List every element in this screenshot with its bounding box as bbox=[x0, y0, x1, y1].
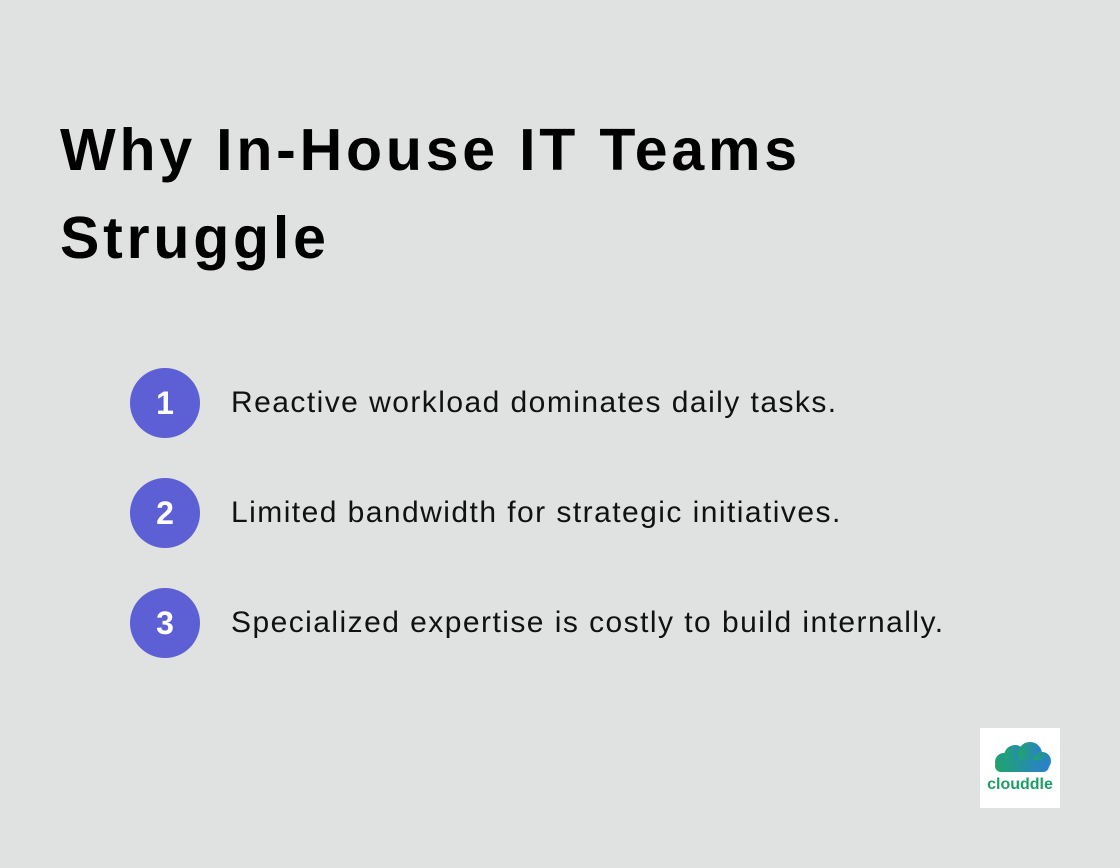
item 2 text: Limited bandwidth for strategic initiatives. bbox=[231, 496, 842, 529]
item 3 bbox=[130, 588, 944, 658]
item 1 bbox=[130, 368, 838, 438]
icon: clouds bbox=[995, 742, 1051, 772]
item 3 text: Specialized expertise is costly to build internally. bbox=[231, 606, 944, 639]
title: Struggle bbox=[60, 205, 330, 271]
number badge 3: 3 bbox=[156, 605, 174, 641]
number badge 3 bbox=[130, 588, 200, 658]
title bbox=[60, 117, 801, 271]
item 2 bbox=[130, 478, 842, 548]
title: Why In-House IT Teams bbox=[60, 117, 801, 183]
number badge 1 bbox=[130, 368, 200, 438]
number badge 2: 2 bbox=[156, 495, 174, 531]
number badge 1: 1 bbox=[156, 385, 174, 421]
item 1 text: Reactive workload dominates daily tasks. bbox=[231, 386, 838, 419]
logo text: clouddle bbox=[987, 776, 1053, 793]
number badge 2 bbox=[130, 478, 200, 548]
logo: clouddle bbox=[980, 728, 1060, 808]
